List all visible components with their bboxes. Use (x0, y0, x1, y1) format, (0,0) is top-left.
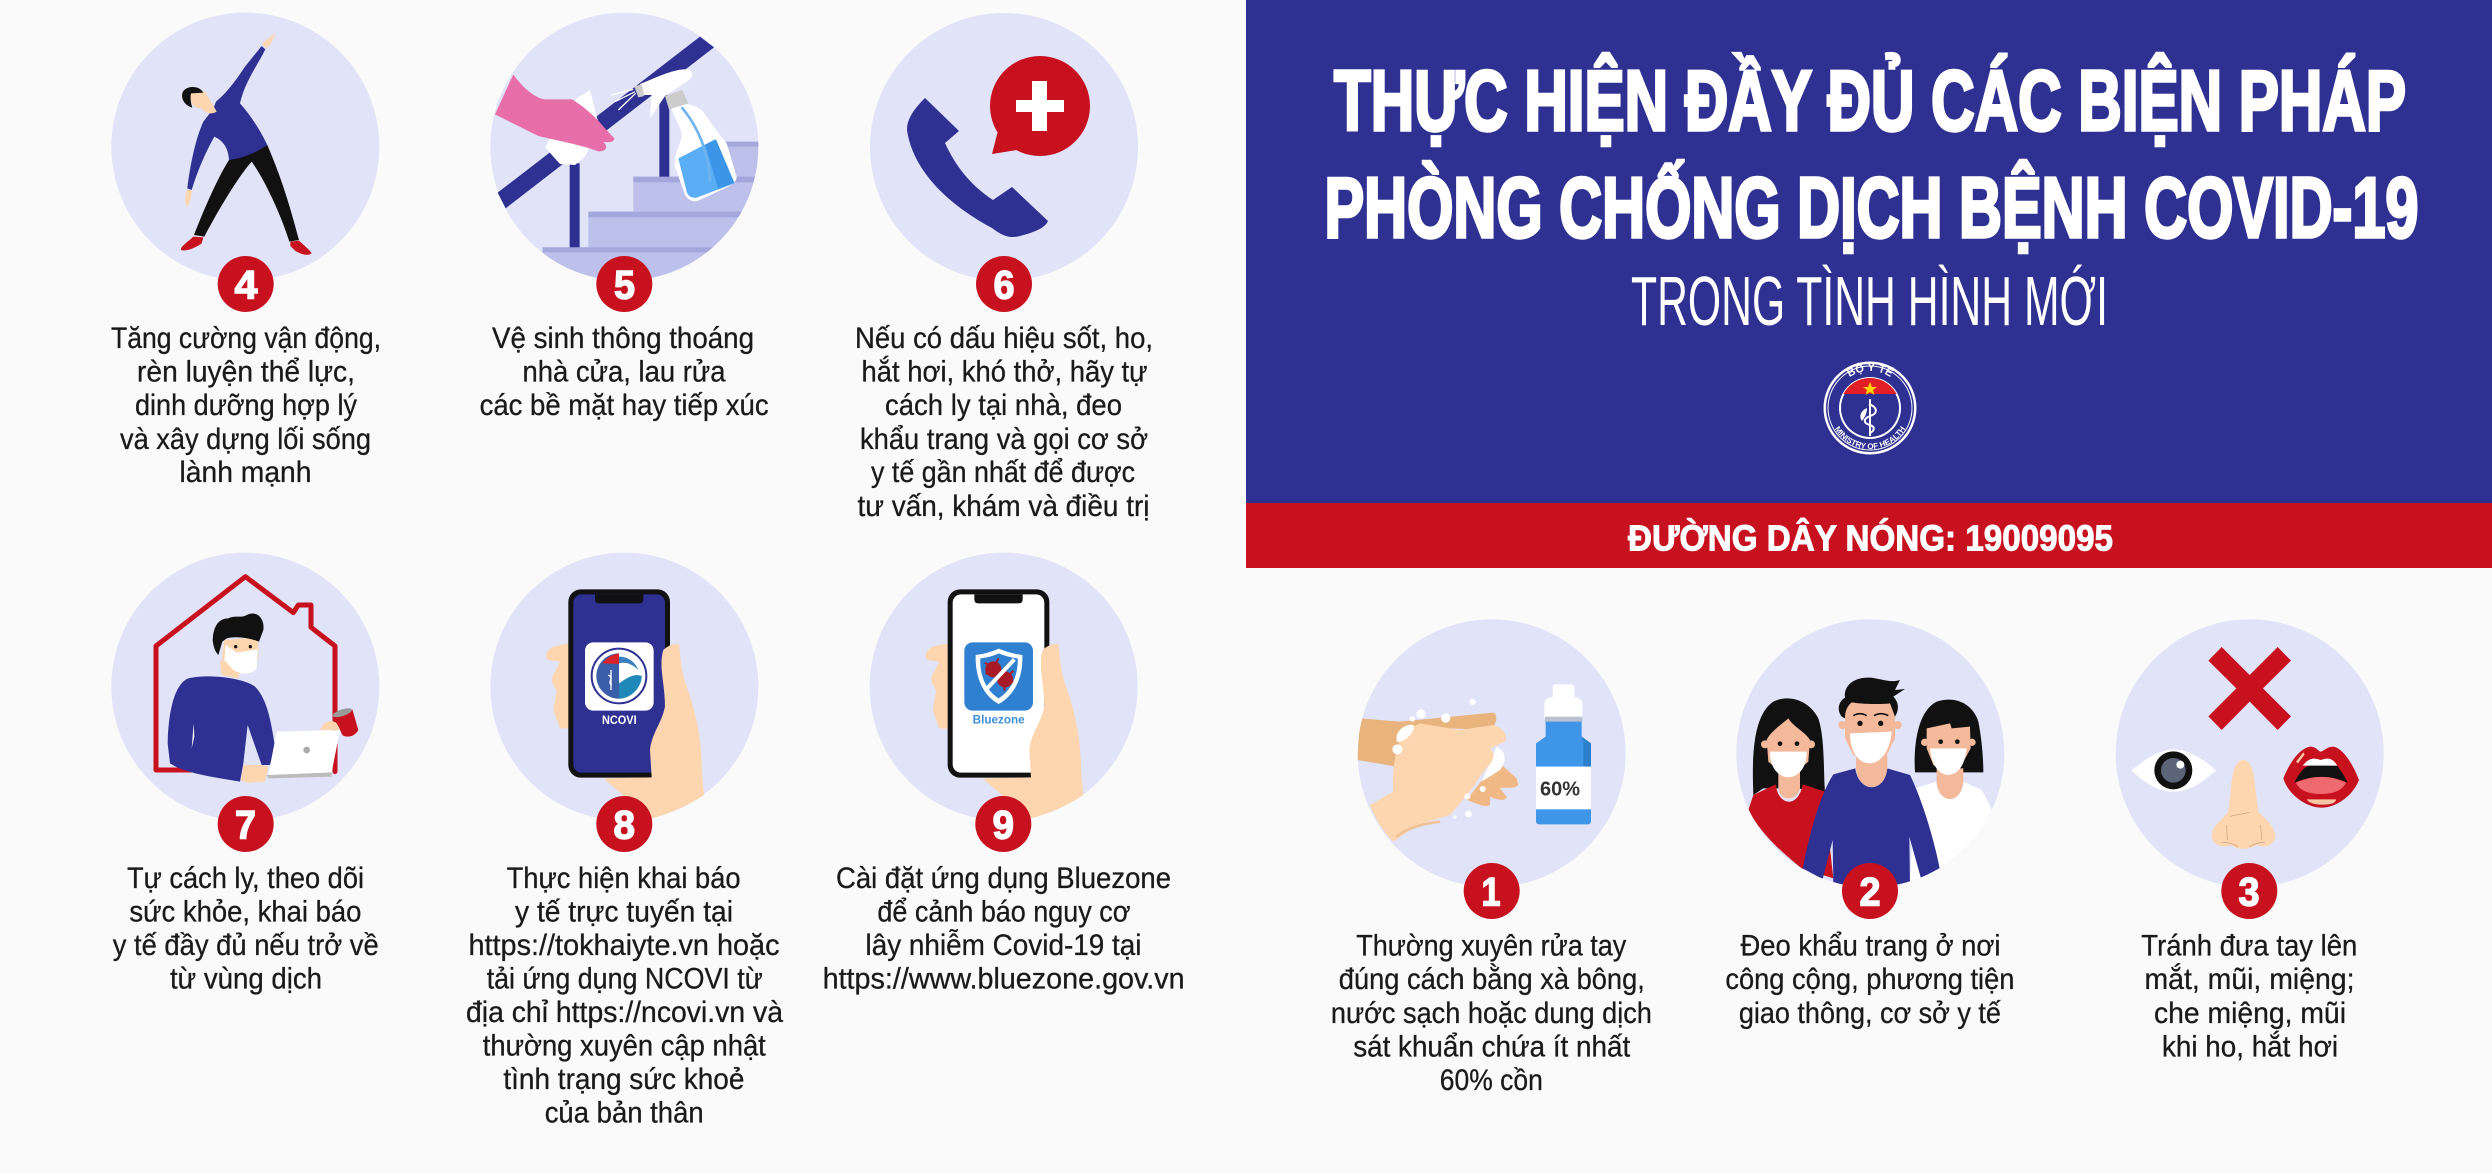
text 3: che miệng, mũi (2154, 997, 2346, 1030)
text 7: sức khỏe, khai báo (129, 896, 361, 928)
badge 6: 6 (994, 264, 1014, 308)
text 5: các bề mặt hay tiếp xúc (480, 389, 769, 422)
text 1: 60% cồn (1440, 1064, 1543, 1097)
icon: cleaning stair rail (490, 13, 762, 284)
badge 3 (2221, 863, 2277, 919)
text 6: cách ly tại nhà, đeo (885, 389, 1122, 422)
text 3: khi ho, hắt hơi (2162, 1030, 2338, 1064)
badge 8 (596, 796, 652, 852)
text 5: nhà cửa, lau rửa (522, 356, 726, 388)
icon: three people wearing masks (1736, 619, 2004, 887)
text 4 (111, 322, 381, 489)
step 3 panel (2116, 619, 2384, 1064)
text 9: https://www.bluezone.gov.vn (823, 962, 1185, 996)
icon: stretching person (111, 13, 379, 281)
text 8: thường xuyên cập nhật (483, 1030, 766, 1062)
text 2: giao thông, cơ sở y tế (1739, 997, 2001, 1030)
text 1: sát khuẩn chứa ít nhất (1353, 1030, 1630, 1064)
text 8 (466, 862, 784, 1130)
icon: phone with Bluezone app (870, 553, 1138, 821)
text 8: của bản thân (545, 1096, 704, 1130)
text 2: Đeo khẩu trang ở nơi (1740, 930, 2000, 962)
badge 2 (1842, 863, 1898, 919)
text 6: tư vấn, khám và điều trị (858, 490, 1150, 523)
badge 2: 2 (1860, 870, 1880, 914)
text 7 (113, 862, 379, 996)
badge 5: 5 (614, 264, 635, 308)
step 9 panel (823, 553, 1185, 996)
badge 5 (596, 256, 652, 312)
text 6: khẩu trang và gọi cơ sở (860, 423, 1148, 456)
step 2 panel (1725, 619, 2014, 1030)
text 7: y tế đầy đủ nếu trở về (113, 929, 379, 962)
text 7: Tự cách ly, theo dõi (127, 862, 364, 895)
text 5 (480, 322, 769, 422)
text 7: từ vùng dịch (170, 962, 322, 996)
badge 6 (976, 256, 1032, 312)
subtitle: TRONG TÌNH HÌNH MỚI (1631, 262, 2108, 340)
hotline bar: ĐƯỜNG DÂY NÓNG: 19009095 (1628, 516, 2113, 558)
step 7 panel (111, 553, 379, 996)
step 6 panel (855, 13, 1153, 523)
text 4: rèn luyện thể lực, (137, 356, 355, 388)
icon: phone with medical bubble (870, 13, 1138, 281)
icon: ministry of health logo: MINISTRY OF HEALTH (1834, 426, 1906, 449)
icon: ministry of health logo (1824, 362, 1916, 454)
hotline bar (1246, 503, 2492, 568)
text 8: https://tokhaiyte.vn hoặc (468, 929, 780, 962)
text 8: Thực hiện khai báo (507, 862, 741, 895)
text 2 (1725, 930, 2014, 1030)
icon: person isolating at home (111, 553, 379, 821)
text 8: địa chỉ https://ncovi.vn và (466, 996, 784, 1029)
panel: header (1246, 0, 2492, 503)
text 2: công cộng, phương tiện (1725, 963, 2014, 996)
text 6: hắt hơi, khó thở, hãy tự (862, 356, 1148, 388)
text 8: tình trạng sức khoẻ (503, 1063, 744, 1096)
badge 9: 9 (992, 804, 1014, 848)
text 1: Thường xuyên rửa tay (1356, 930, 1627, 962)
text 3: Tránh đưa tay lên (2141, 930, 2357, 962)
icon: phone with NCOVI app (490, 553, 758, 821)
text 9: Cài đặt ứng dụng Bluezone (836, 862, 1171, 895)
text 1: nước sạch hoặc dung dịch (1331, 997, 1652, 1030)
icon: ministry of health logo: BỘ Y TẾ (1846, 362, 1895, 377)
text 8: tải ứng dụng NCOVI từ (487, 962, 763, 996)
text 5: Vệ sinh thông thoáng (492, 322, 754, 355)
icon: phone with Bluezone app: Bluezone (973, 713, 1025, 727)
step 4 panel (111, 13, 381, 489)
icon: hand washing and sanitizer (1357, 619, 1626, 887)
text 4: dinh dưỡng hợp lý (135, 389, 357, 422)
text 8: y tế trực tuyến tại (515, 896, 733, 928)
icon: hand washing and sanitizer: 60% (1540, 778, 1580, 800)
icon: do not touch eye nose mouth (2116, 619, 2384, 887)
step 5 panel (480, 13, 769, 422)
text 6: y tế gần nhất để được (871, 456, 1135, 489)
badge 8: 8 (614, 804, 635, 848)
text 9: để cảnh báo nguy cơ (877, 896, 1130, 928)
badge 1: 1 (1482, 870, 1500, 914)
text 6: Nếu có dấu hiệu sốt, ho, (855, 322, 1153, 355)
text 1: đúng cách bằng xà bông, (1339, 963, 1645, 996)
text 9: lây nhiễm Covid-19 tại (866, 929, 1142, 962)
step 8 panel (466, 553, 784, 1130)
badge 3: 3 (2238, 870, 2260, 914)
text 4: và xây dựng lối sống (120, 423, 371, 456)
badge 7 (218, 796, 274, 852)
badge 9 (975, 796, 1031, 852)
text 3: mắt, mũi, miệng; (2144, 963, 2354, 996)
icon: phone with NCOVI app: NCOVI (602, 713, 637, 727)
text 6 (855, 322, 1153, 523)
text 4: Tăng cường vận động, (111, 322, 381, 355)
step 1 panel (1331, 619, 1652, 1097)
badge 4: 4 (234, 264, 258, 308)
badge 1 (1464, 863, 1520, 919)
text 1 (1331, 930, 1652, 1097)
text 4: lành mạnh (180, 456, 312, 489)
badge 4 (218, 256, 274, 312)
badge 7: 7 (235, 804, 256, 848)
text 3 (2141, 930, 2357, 1064)
text 9 (823, 862, 1185, 996)
